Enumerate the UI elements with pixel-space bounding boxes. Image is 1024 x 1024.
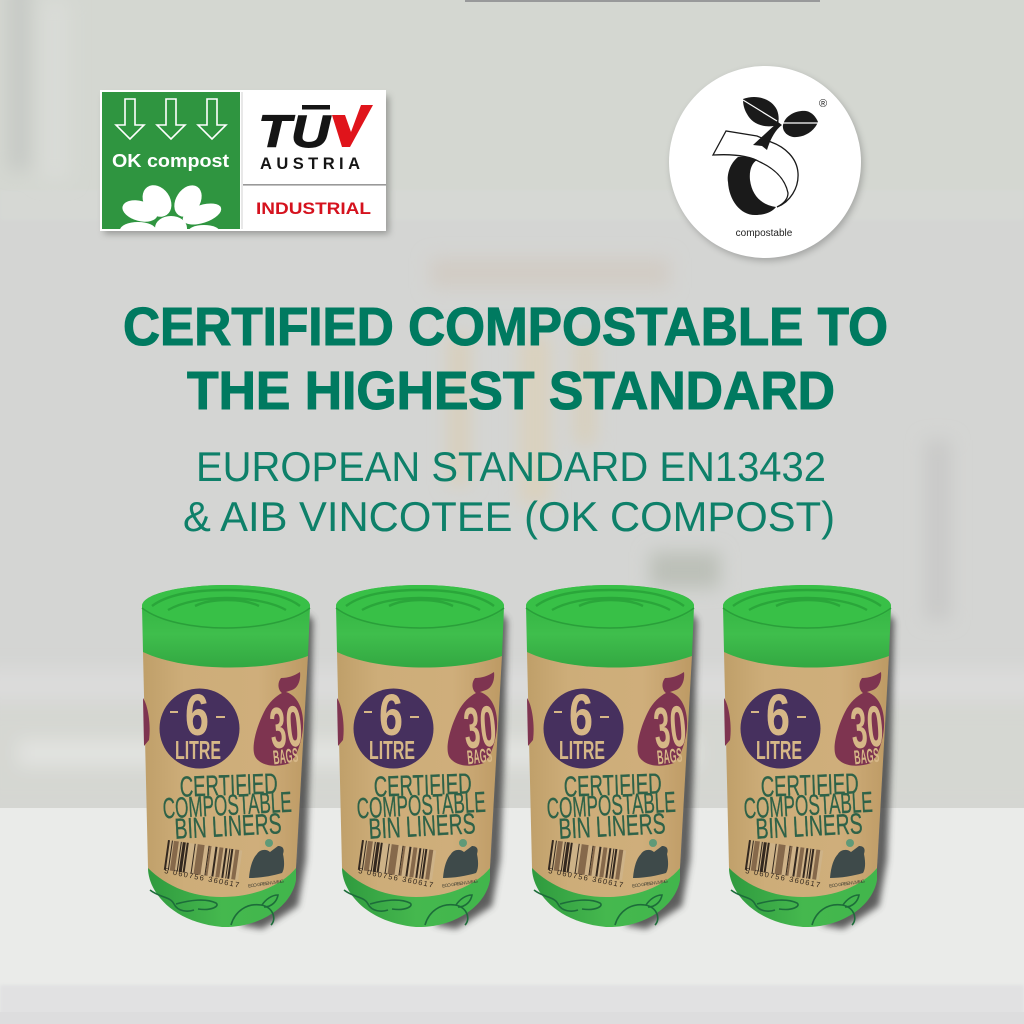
product roll 4: BAGS	[853, 745, 880, 769]
product roll 3: BIN LINERS	[558, 808, 666, 846]
product roll 4: 5 060756 360617	[745, 866, 821, 889]
product roll 4: CERTIFIED	[760, 768, 859, 804]
product roll 4: COMPOSTABLE	[743, 787, 873, 825]
subtitle: & AIB VINCOTEE (OK COMPOST)	[183, 493, 835, 540]
product roll 2: ECO GREEN LIVING	[442, 878, 479, 888]
product roll 2: 6	[379, 683, 403, 748]
product roll 2: 30	[461, 694, 499, 761]
product roll 4: 6	[766, 683, 790, 748]
product roll 3	[526, 585, 697, 929]
certification badge: OK compost TUV Austria Industrial	[100, 90, 389, 240]
product roll 3: 30	[651, 694, 689, 761]
seedling compostable logo	[669, 66, 863, 261]
subtitle	[183, 443, 835, 540]
product roll 1: 5 060756 360617	[164, 866, 240, 889]
subtitle: EUROPEAN STANDARD EN13432	[196, 443, 826, 490]
label: Industrial: INDUSTRIAL	[256, 199, 371, 218]
product roll 4: LITRE	[756, 735, 802, 765]
product roll 2: LITRE	[369, 735, 415, 765]
product roll 1: ECO GREEN LIVING	[248, 878, 285, 888]
product roll 4: 30	[848, 694, 886, 761]
product roll 2: COMPOSTABLE	[356, 787, 486, 825]
product roll 1: 6	[185, 683, 209, 748]
product roll 4: ECO GREEN LIVING	[829, 878, 866, 888]
product roll 1: COMPOSTABLE	[162, 787, 292, 825]
logo: TUV Austria: TU	[258, 106, 332, 157]
icon: seedling	[713, 97, 818, 215]
title	[123, 297, 888, 421]
logo: TUV Austria: AUSTRIA	[260, 155, 360, 173]
product roll 1: CERTIFIED	[179, 768, 278, 804]
product roll 1: BAGS	[272, 745, 299, 769]
product roll 2	[336, 585, 507, 929]
product roll 3: LITRE	[559, 735, 605, 765]
product roll 1: BIN LINERS	[174, 808, 282, 846]
product roll 2: CERTIFIED	[373, 768, 472, 804]
title: THE HIGHEST STANDARD	[187, 361, 835, 421]
product roll 3: ECO GREEN LIVING	[632, 878, 669, 888]
product roll 3: 5 060756 360617	[548, 866, 624, 889]
title: CERTIFIED COMPOSTABLE TO	[123, 297, 888, 357]
product roll 1: 30	[267, 694, 305, 761]
logo: TUV Austria	[258, 105, 373, 173]
product roll 4	[723, 585, 894, 929]
icon: OK compost green panel: OK compost	[112, 150, 229, 171]
registered mark: ®	[819, 98, 827, 110]
product roll 1: LITRE	[175, 735, 221, 765]
icon: OK compost green panel	[102, 92, 240, 240]
product roll 3: BAGS	[656, 745, 683, 769]
product roll 1	[142, 585, 313, 929]
product roll 2: 5 060756 360617	[358, 866, 434, 889]
product roll 3: CERTIFIED	[563, 768, 662, 804]
product roll 3: COMPOSTABLE	[546, 787, 676, 825]
product roll 3: 6	[569, 683, 593, 748]
product roll 4: BIN LINERS	[755, 808, 863, 846]
text: compostable: compostable	[736, 228, 793, 239]
product roll 2: BIN LINERS	[368, 808, 476, 846]
product roll 2: BAGS	[466, 745, 493, 769]
